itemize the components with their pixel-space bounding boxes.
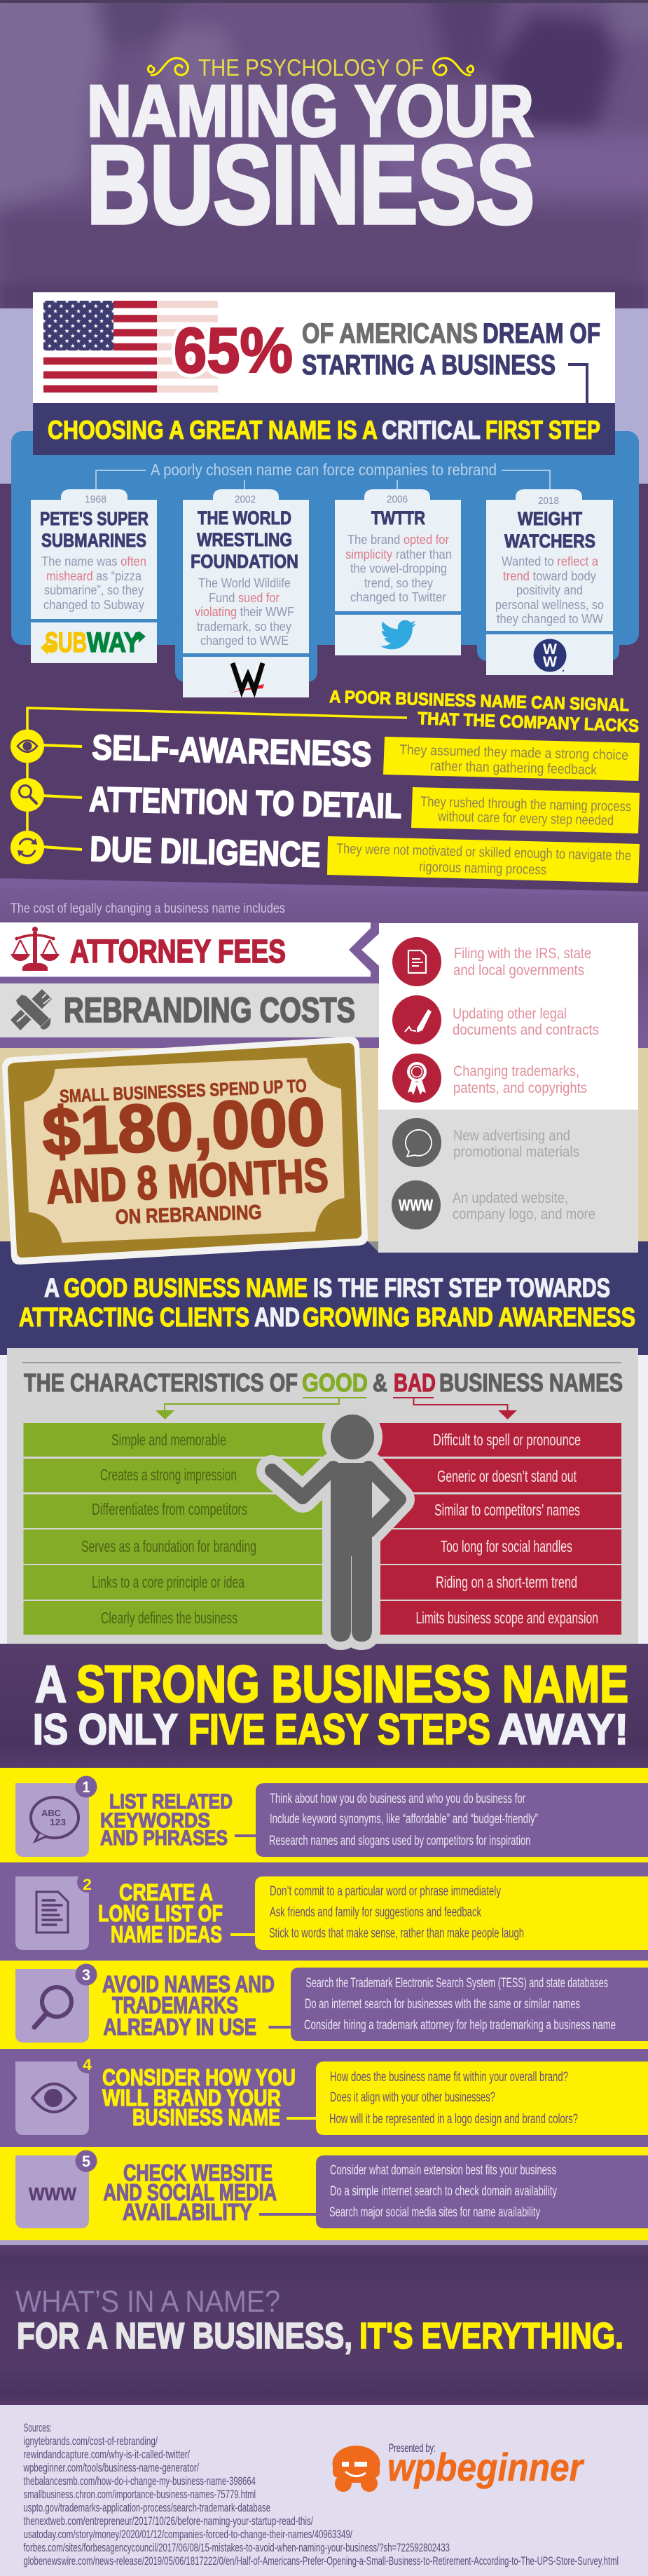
- sources list: thebalancesmb.com/how-do-i-change-my-business-name-398664: [24, 2474, 256, 2488]
- bad column: [375, 1423, 621, 1635]
- heading: a strong business name: [33, 1655, 628, 1753]
- card: Weight Watchers: they changed to WW: [497, 612, 603, 626]
- panel: attorney fee items: documents and contracts: [453, 1022, 599, 1038]
- panel: rebrand examples blue background: [11, 431, 639, 682]
- logo: wpbeginner: Presented by:: [389, 2441, 436, 2455]
- bad column: Generic or doesn’t stand out: [437, 1467, 577, 1485]
- icon: speech bubble abc: ABC: [41, 1808, 62, 1818]
- card: The World Wrestling Foundation: THE WORLD: [198, 507, 291, 529]
- step heading: KEYWORDS: [100, 1809, 210, 1832]
- step tips: Search major social media sites for name availability: [329, 2205, 540, 2220]
- panel heading: &: [373, 1368, 387, 1397]
- step heading: CHECK WEBSITE: [123, 2160, 273, 2186]
- icon: eye badge: [11, 729, 82, 763]
- cost intro text: The cost of legally changing a business name includes: [11, 901, 285, 916]
- panel: rebranding cost items: promotional materials: [453, 1144, 579, 1160]
- sources list: uspto.gov/trademarks-application-process/search-trademark-database: [24, 2501, 270, 2514]
- card: The World Wrestling Foundation: Fund sued for: [209, 591, 280, 605]
- step tips: Does it align with your other businesses?: [330, 2090, 495, 2105]
- icon: subway logo: SUB: [45, 627, 87, 658]
- icon: mascot: [332, 2446, 380, 2492]
- icon: subway logo: [41, 627, 146, 658]
- icon: scales: [11, 927, 60, 971]
- icon: speech bubble abc: 123: [50, 1817, 66, 1827]
- banner: critical first step: CRITICAL: [382, 416, 481, 444]
- bad column: Riding on a short-term trend: [436, 1573, 577, 1591]
- card: Pete's Super Submarines: submarine”, so they: [44, 583, 144, 597]
- banner: critical first step: FIRST STEP: [485, 416, 600, 444]
- card: The World Wrestling Foundation: [183, 489, 309, 697]
- signal: attention to detail: [89, 779, 640, 833]
- icon: www: 5: [82, 2153, 90, 2170]
- icon: document: [392, 937, 441, 986]
- main title: BUSINESS: [87, 123, 535, 247]
- stat text: STARTING A BUSINESS: [302, 350, 556, 381]
- card: Twttr: trend, so they: [364, 576, 433, 590]
- panel: attorney fee items: Changing trademarks,: [453, 1063, 579, 1079]
- step heading: AND PHRASES: [100, 1827, 228, 1850]
- logo: wpbeginner: wpbeginner: [387, 2445, 585, 2489]
- icon: american flag: [43, 301, 218, 393]
- card: Weight Watchers: WATCHERS: [504, 531, 595, 552]
- closing statement: [15, 2284, 623, 2357]
- arrow: good: [156, 1398, 366, 1419]
- step tips: Stick to words that make sense, rather than make people laugh: [269, 1926, 524, 1941]
- signal: due diligence: DUE DILIGENCE: [90, 829, 321, 875]
- icon: www: [15, 2151, 97, 2228]
- panel: attorney fee items: [378, 923, 638, 1110]
- icon: magnifier: [15, 1964, 97, 2043]
- icon: ww logo: W: [543, 654, 557, 670]
- step 3: [15, 1964, 648, 2043]
- callout: small business voucher: SMALL BUSINESSES SPEND UP TO: [59, 1075, 307, 1107]
- card: The World Wrestling Foundation: FOUNDATION: [191, 551, 298, 572]
- step tips: [316, 2062, 648, 2135]
- icon: www: [392, 1180, 441, 1229]
- panel heading: [24, 1368, 623, 1397]
- icon: ribbon: [392, 1054, 441, 1103]
- step heading: CREATE A: [119, 1879, 213, 1905]
- step tips: Don’t commit to a particular word or phrase immediately: [270, 1884, 501, 1899]
- signal: self-awareness: [92, 728, 640, 781]
- step heading: NAME IDEAS: [111, 1921, 222, 1947]
- sources list: [23, 2421, 619, 2568]
- icon: speech bubble abc: 1: [83, 1778, 90, 1796]
- main title: NAMING YOUR: [87, 71, 534, 152]
- bad column: Difficult to spell or pronounce: [433, 1431, 581, 1449]
- title ornaments: [149, 58, 474, 75]
- icon: refresh badge: [11, 831, 82, 864]
- heading: a poor business name can signal: [329, 687, 640, 736]
- icon: www: WWW: [399, 1197, 433, 1214]
- card: Weight Watchers: Wanted to reflect a: [502, 554, 599, 568]
- heading: a good business name: A: [44, 1274, 60, 1303]
- heading: a strong business name: IS ONLY: [33, 1705, 178, 1753]
- sources list: thenextweb.com/entrepreneur/2017/10/26/before-naming-your-startup-read-this/: [24, 2514, 313, 2528]
- step heading: ALREADY IN USE: [104, 2014, 256, 2040]
- step heading: [102, 1971, 275, 2040]
- step tips: [255, 1876, 648, 1950]
- card: The World Wrestling Foundation: 2002: [235, 493, 256, 505]
- icon: eye: [15, 2052, 98, 2135]
- good column: [24, 1423, 328, 1635]
- hero photo background: [0, 0, 648, 322]
- icon: eye: 4: [83, 2056, 92, 2073]
- heading: a strong business name: FIVE EASY STEPS: [188, 1705, 490, 1753]
- sources list: ignytebrands.com/cost-of-rebranding/: [24, 2434, 158, 2448]
- panel: attorney fee items: and local governments: [453, 962, 584, 979]
- heading: ATTORNEY FEES: [70, 933, 286, 969]
- panel heading: GOOD: [302, 1368, 368, 1397]
- panel: rebranding cost items: [368, 1110, 638, 1253]
- card: Pete's Super Submarines: SUBMARINES: [41, 530, 146, 551]
- signal: attention to detail: ATTENTION TO DETAIL: [89, 779, 402, 826]
- card: Weight Watchers: positivity and: [516, 583, 583, 597]
- step tips: Include keyword synonyms, like “affordable” and “budget-friendly”: [270, 1812, 538, 1827]
- card: Weight Watchers: 2018: [538, 495, 559, 507]
- icon: pen: [392, 995, 441, 1044]
- callout: small business voucher: ON REBRANDING: [115, 1201, 262, 1229]
- card: The World Wrestling Foundation: trademark, so they: [197, 620, 291, 634]
- title kicker: THE PSYCHOLOGY OF: [198, 55, 424, 81]
- step heading: WILL BRAND YOUR: [102, 2085, 281, 2111]
- banner: rebranding costs: [0, 977, 379, 1048]
- panel: attorney fee items: Filing with the IRS, state: [454, 946, 591, 962]
- icon: pencil and ruler: [11, 989, 52, 1030]
- card: Pete's Super Submarines: misheard as “pizza: [46, 569, 142, 583]
- card: Pete's Super Submarines: The name was often: [41, 554, 146, 568]
- card: Twttr: TWTTR: [371, 507, 425, 529]
- panel: attorney fee items: Updating other legal: [453, 1006, 567, 1022]
- signal: attention to detail: without care for every step needed: [437, 809, 614, 829]
- panel: rebranding cost items: company logo, and more: [453, 1206, 595, 1222]
- card: The World Wrestling Foundation: changed to WWE: [200, 634, 289, 648]
- icon: ww logo: [534, 639, 566, 672]
- sources list: rewindandcapture.com/why-is-it-called-twitter/: [24, 2448, 190, 2461]
- card: Pete's Super Submarines: 1968: [85, 493, 106, 505]
- sources list: forbes.com/sites/forbesagencycouncil/2017/06/08/15-mistakes-to-avoid-when-naming-your-business/?sh=722592802433: [24, 2541, 450, 2554]
- main title: [87, 71, 535, 247]
- panel: rebranding cost items: An updated website,: [453, 1190, 568, 1206]
- card: Weight Watchers: WEIGHT: [518, 508, 582, 529]
- stat text: DREAM OF: [483, 318, 600, 349]
- panel: rebranding cost items: New advertising and: [453, 1128, 570, 1144]
- icon: www: WWW: [29, 2183, 76, 2204]
- step heading: LIST RELATED: [109, 1790, 233, 1813]
- sources list: usatoday.com/story/money/2020/01/12/companies-forced-to-change-their-names/40963349/: [24, 2528, 352, 2541]
- step tips: [316, 2155, 648, 2228]
- stat number: 65%: [174, 315, 293, 386]
- signal: due diligence: rigorous naming process: [419, 859, 546, 878]
- heading: a good business name: [19, 1274, 635, 1333]
- icon: speech bubble abc: [15, 1776, 97, 1857]
- step heading: TRADEMARKS: [112, 1992, 238, 2018]
- step heading: [100, 1790, 233, 1850]
- signal: self-awareness: rather than gathering feedback: [430, 758, 598, 778]
- heading: REBRANDING COSTS: [64, 990, 355, 1030]
- card: The World Wrestling Foundation: violating their WWF: [195, 605, 294, 619]
- banner: critical first step: CHOOSING A GREAT NAME IS A: [48, 416, 378, 444]
- icon: standing person: [272, 1415, 399, 1642]
- heading: a good business name: GOOD BUSINESS NAME: [64, 1274, 308, 1303]
- step heading: CONSIDER HOW YOU: [102, 2064, 296, 2090]
- card: Twttr: changed to Twitter: [350, 590, 446, 604]
- card: Twttr: the vowel-dropping: [350, 561, 447, 575]
- panel: characteristics of good and bad names: [7, 1348, 638, 1644]
- heading: a strong business name: A: [35, 1655, 67, 1713]
- callout: small business voucher: $180,000: [41, 1084, 326, 1170]
- sources list: wpbeginner.com/tools/business-name-generator/: [23, 2461, 199, 2474]
- icon: document list: 2: [83, 1876, 92, 1893]
- card: Twttr: [335, 489, 461, 655]
- arrow: bad: [393, 1398, 517, 1419]
- heading: a good business name: ATTRACTING CLIENTS: [19, 1303, 249, 1333]
- panel heading: BAD: [394, 1368, 436, 1397]
- step heading: AND SOCIAL MEDIA: [104, 2179, 277, 2205]
- rebrand subtitle: A poorly chosen name can force companies to rebrand: [151, 461, 497, 479]
- banner: attorney fees: [0, 922, 379, 977]
- step heading: [104, 2160, 277, 2225]
- step 5: [15, 2151, 648, 2228]
- card: Weight Watchers: [486, 489, 613, 675]
- step heading: [98, 1879, 223, 1947]
- logo: wpbeginner: [332, 2441, 585, 2492]
- closing statement: WHAT’S IN A NAME?: [15, 2284, 280, 2319]
- step tips: Do a simple internet search to check domain availability: [330, 2184, 557, 2199]
- callout: small business voucher: AND 8 MONTHS: [45, 1148, 329, 1214]
- stat number: 65%: [174, 315, 293, 386]
- bad column: Too long for social handles: [441, 1537, 572, 1555]
- card: Twttr: simplicity rather than: [345, 547, 452, 561]
- good column: Clearly defines the business: [101, 1609, 237, 1627]
- good column: Links to a core principle or idea: [92, 1573, 244, 1591]
- step 1: [15, 1776, 648, 1857]
- step heading: BUSINESS NAME: [132, 2104, 280, 2130]
- step tips: [291, 1968, 648, 2041]
- panel heading: THE CHARACTERISTICS OF: [24, 1368, 298, 1397]
- step tips: Think about how you do business and who you do business for: [270, 1792, 525, 1806]
- step heading: [102, 2064, 296, 2130]
- card: Pete's Super Submarines: PETE'S SUPER: [40, 508, 149, 529]
- sources list: Sources:: [24, 2421, 52, 2434]
- closing statement: FOR A NEW BUSINESS,: [17, 2316, 352, 2357]
- step 4: [15, 2052, 648, 2135]
- icon: speech bubble: [392, 1118, 441, 1167]
- card: Pete's Super Submarines: [31, 489, 157, 663]
- good column: Simple and memorable: [111, 1431, 226, 1449]
- step heading: LONG LIST OF: [98, 1900, 223, 1926]
- good column: Differentiates from competitors: [92, 1500, 247, 1518]
- icon: subway logo: WAY: [87, 627, 140, 658]
- icon: magnifier badge: [11, 778, 82, 812]
- card: The World Wrestling Foundation: WRESTLING: [197, 529, 292, 550]
- icon: ww logo: W: [543, 641, 557, 657]
- card: Weight Watchers: trend toward body: [503, 569, 596, 583]
- banner: critical first step: [33, 403, 615, 455]
- signal: due diligence: [90, 829, 640, 883]
- callout: small business voucher: [2, 1037, 368, 1265]
- step 2: [15, 1872, 648, 1950]
- heading: a strong business name: AWAY!: [498, 1705, 628, 1753]
- card: Weight Watchers: personal wellness, so: [495, 598, 604, 612]
- step tips: [256, 1783, 648, 1857]
- card: Twttr: 2006: [387, 493, 408, 505]
- card: Pete's Super Submarines: changed to Subway: [43, 598, 144, 612]
- good column: Creates a strong impression: [100, 1466, 237, 1484]
- icon: wwe logo: [228, 663, 264, 693]
- icon: document list: [15, 1872, 98, 1950]
- good column: Serves as a foundation for branding: [81, 1537, 256, 1555]
- stat text: [302, 318, 600, 381]
- connector: yellow signal line: [27, 708, 407, 847]
- heading: a good business name: AND: [254, 1303, 300, 1333]
- stat text: OF AMERICANS: [302, 318, 478, 349]
- icon: twitter bird: [380, 620, 416, 649]
- step tips: Ask friends and family for suggestions and feedback: [270, 1905, 481, 1920]
- sources list: smallbusiness.chron.com/importance-business-names-75779.html: [24, 2488, 256, 2501]
- card: The World Wrestling Foundation: The World Wildlife: [198, 576, 291, 590]
- panel: attorney fee items: patents, and copyrights: [453, 1080, 587, 1096]
- step heading: AVOID NAMES AND: [102, 1971, 275, 1997]
- step tips: Research names and slogans used by competitors for inspiration: [269, 1834, 531, 1848]
- step heading: AVAILABILITY: [123, 2199, 252, 2225]
- card: Twttr: The brand opted for: [347, 533, 449, 547]
- rebrand subtitle: [96, 461, 550, 490]
- panel: 65 percent stat: [33, 292, 615, 404]
- bad column: Similar to competitors’ names: [434, 1501, 580, 1519]
- icon: magnifier: 3: [82, 1966, 90, 1984]
- signal: self-awareness: SELF-AWARENESS: [92, 728, 372, 774]
